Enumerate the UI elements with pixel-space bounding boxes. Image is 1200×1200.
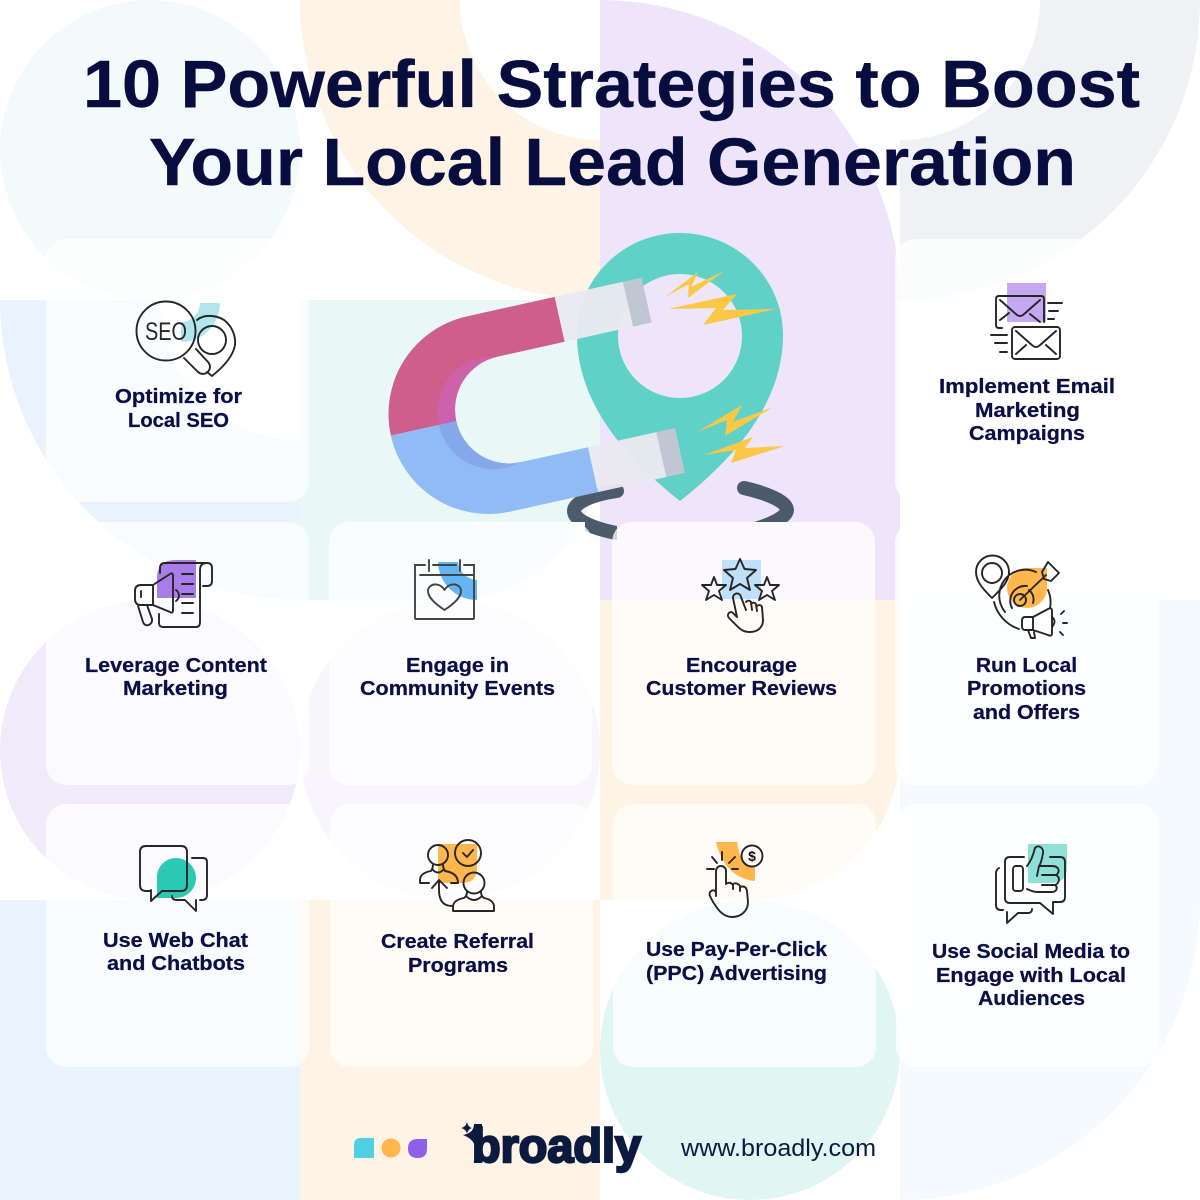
- label: Local SEO: [128, 410, 229, 432]
- label: [646, 655, 837, 700]
- label: Marketing: [975, 400, 1080, 422]
- label: Implement Email: [939, 376, 1115, 398]
- card: Use Web Chat and Chatbots: [46, 804, 309, 1067]
- label: Leverage Content: [85, 655, 267, 677]
- label: Encourage: [686, 655, 797, 677]
- icon: clicking hand and dollar: $: [748, 848, 756, 864]
- label: Customer Reviews: [646, 678, 837, 700]
- footer: broadly logo: broadly: [472, 1119, 641, 1172]
- label: Marketing: [123, 678, 228, 700]
- ring under the pin: [574, 488, 787, 533]
- label: [939, 376, 1115, 445]
- label: Programs: [408, 955, 508, 977]
- card: Engage in Community Events: [329, 522, 592, 785]
- label: [360, 655, 555, 700]
- label: and Offers: [973, 702, 1080, 724]
- label: Use Pay-Per-Click: [646, 939, 828, 961]
- icon: stars and hand: [702, 559, 779, 632]
- icon: chat bubbles: [140, 846, 207, 911]
- card: Use Pay-Per-Click Advertising: [613, 804, 876, 1067]
- label: Campaigns: [969, 423, 1085, 445]
- label: Engage with Local: [936, 965, 1126, 987]
- label: and Chatbots: [107, 953, 245, 975]
- label: Community Events: [360, 678, 555, 700]
- label: Engage in: [406, 655, 509, 677]
- label: Create Referral: [381, 931, 534, 953]
- card: Leverage Content Marketing: [46, 522, 309, 785]
- label: [381, 931, 534, 977]
- icon: calendar with heart: [415, 560, 477, 619]
- icon: pin, target and megaphone: [976, 556, 1067, 638]
- title: Your Local Lead Generation: [149, 125, 1076, 200]
- location pin: [577, 233, 783, 501]
- icon: referral people: [420, 840, 494, 911]
- label: [115, 386, 242, 432]
- lightning bolts: [665, 271, 785, 463]
- label: [646, 939, 828, 985]
- title: [83, 47, 1140, 200]
- icon: envelopes: [991, 283, 1062, 359]
- label: Promotions: [967, 678, 1086, 700]
- hero: location pin with magnet: [369, 233, 787, 533]
- icon: clicking hand and dollar: [707, 842, 762, 917]
- label: Run Local: [976, 655, 1077, 677]
- card: Optimize for Local SEO: [46, 239, 309, 502]
- label: Optimize for: [115, 386, 242, 408]
- icon: megaphone and paper scroll: [135, 560, 212, 627]
- card: Encourage Customer Reviews: [612, 522, 875, 785]
- icon: thumbs up speech bubbles: [996, 844, 1067, 923]
- card: Use Social Media to Engage with Local Audiences: [896, 804, 1159, 1067]
- icon: SEO magnifier and pin: [136, 302, 235, 376]
- label: [967, 655, 1086, 724]
- footer: brand dots: [354, 1138, 427, 1158]
- label: (PPC) Advertising: [646, 963, 827, 985]
- card: Implement Email Marketing Campaigns: [895, 239, 1158, 502]
- label: [85, 655, 267, 700]
- title: 10 Powerful Strategies to Boost: [83, 47, 1140, 122]
- label: Audiences: [978, 988, 1085, 1010]
- label: Use Web Chat: [103, 930, 248, 952]
- card: Run Local Promotions and Offers: [895, 522, 1158, 785]
- horseshoe magnet: [369, 278, 685, 533]
- label: [103, 930, 248, 975]
- icon: SEO magnifier and pin: SEO: [145, 318, 187, 346]
- label: [932, 941, 1130, 1010]
- label: Use Social Media to: [932, 941, 1130, 963]
- card: Create Referral Programs: [330, 804, 593, 1067]
- footer: website url: www.broadly.com: [680, 1135, 876, 1162]
